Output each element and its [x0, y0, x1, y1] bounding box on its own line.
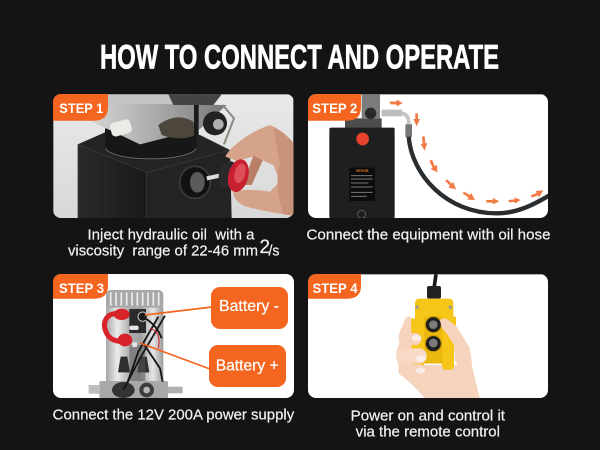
photo: oil filling on tank	[53, 94, 293, 218]
caption: step 1: 2	[260, 237, 270, 258]
flow arrows	[389, 100, 543, 204]
badge: step 4	[308, 274, 361, 299]
hand back	[396, 316, 480, 398]
badge: step 2: STEP 2	[312, 100, 357, 116]
leader lines	[140, 307, 212, 369]
caption: step 3: Connect the 12V 200A power supply	[53, 408, 295, 424]
caption: step 4: via the remote control	[356, 425, 500, 441]
caption: step 4: Power on and control it	[351, 409, 505, 425]
panel: step 2	[306, 94, 550, 244]
photo: hose connection	[308, 94, 550, 218]
hose	[402, 113, 409, 125]
caption: step 1: /s	[268, 244, 280, 260]
badge: step 3	[53, 274, 108, 299]
badge: step 3: STEP 3	[59, 280, 104, 296]
badge: step 2	[308, 94, 361, 121]
caption: step 2: Connect the equipment with oil hose	[306, 228, 550, 244]
hand	[225, 125, 293, 216]
black wires	[123, 316, 165, 390]
panel: step 3	[53, 274, 295, 424]
panel: step 4	[308, 274, 548, 441]
panel: step 1	[53, 94, 293, 260]
photo: hand with remote control	[308, 274, 548, 398]
caption: step 1: viscosity range of 22-46 mm	[68, 244, 258, 260]
badge: step 1: STEP 1	[59, 100, 103, 116]
caption: step 1	[68, 228, 280, 260]
fingers	[399, 333, 421, 345]
label: battery plus	[209, 345, 286, 387]
label: battery minus	[211, 287, 288, 329]
photo: pump unit and wiring	[53, 274, 294, 398]
caption: step 4	[351, 409, 505, 441]
control body	[411, 299, 456, 370]
label: battery minus: Battery -	[219, 298, 279, 315]
label: battery plus: Battery +	[216, 358, 279, 374]
red shackle	[104, 313, 125, 342]
badge: step 4: STEP 4	[312, 280, 358, 296]
thumb	[440, 318, 472, 367]
photo: hose connection: VEVOR	[356, 169, 369, 173]
caption: step 1: Inject hydraulic oil with a	[88, 228, 255, 244]
badge: step 1	[53, 94, 108, 121]
